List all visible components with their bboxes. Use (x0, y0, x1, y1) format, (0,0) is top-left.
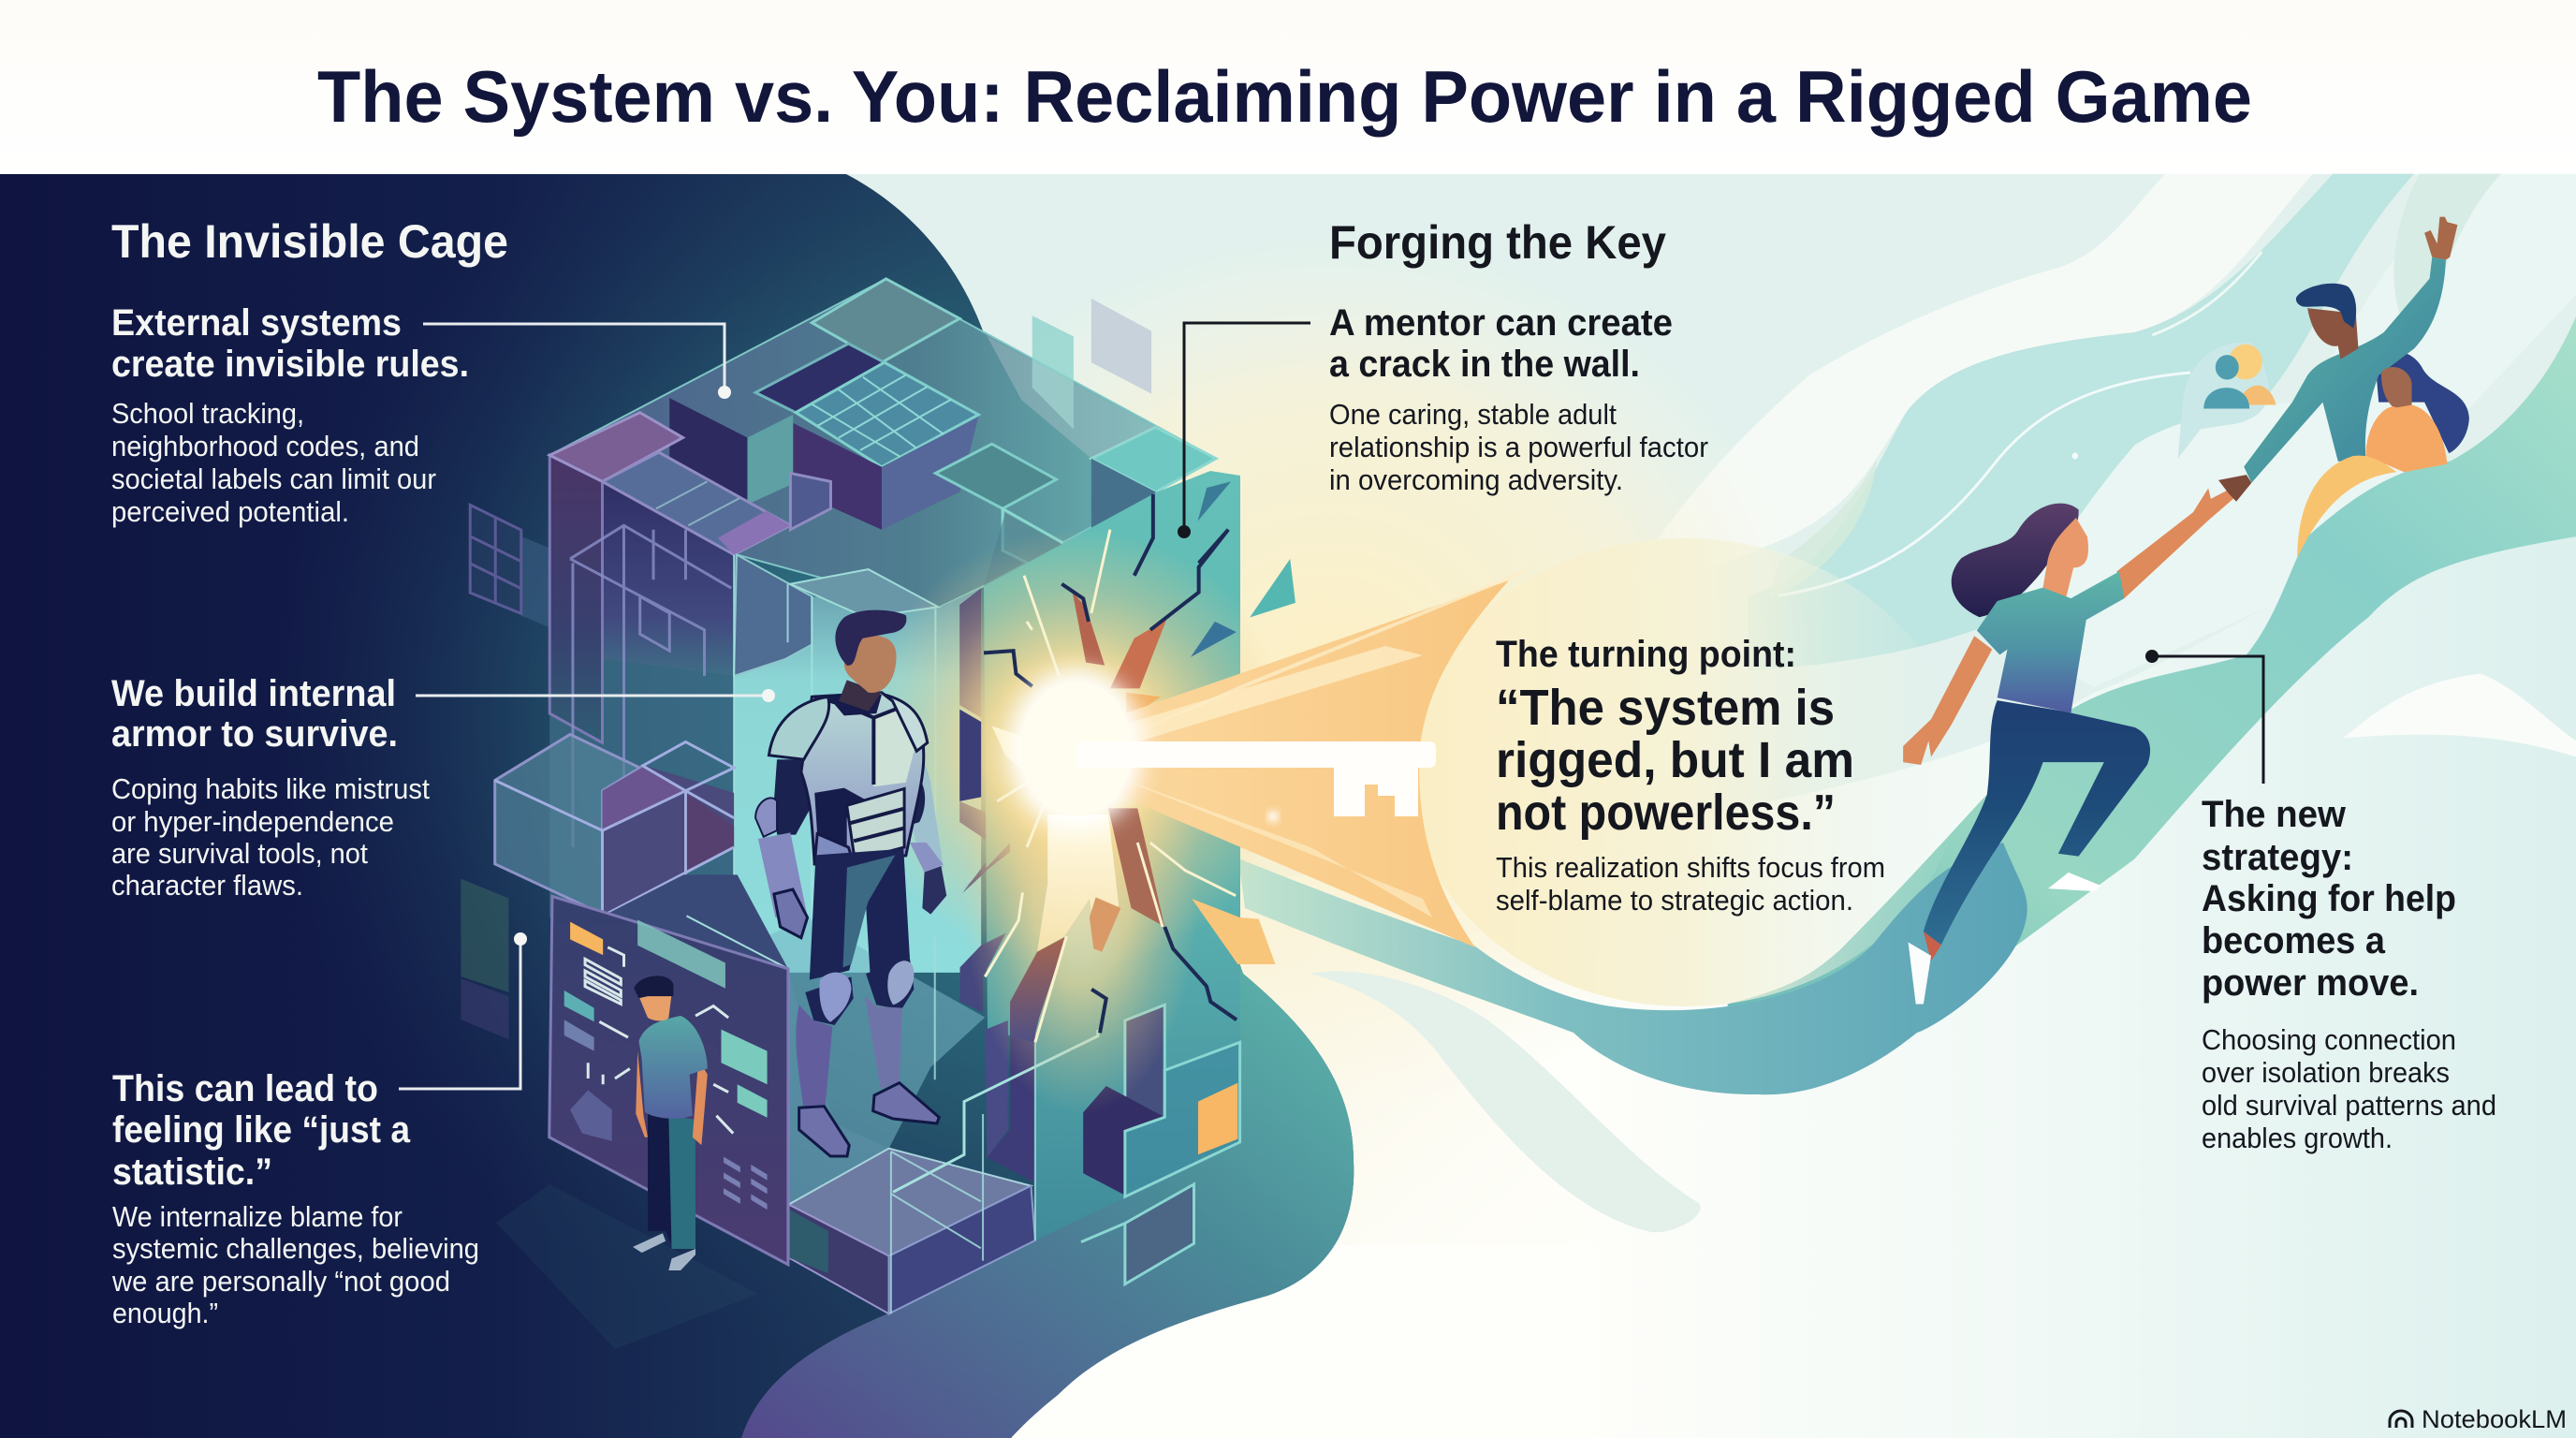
armored man (755, 610, 946, 1156)
text block: mentor (1329, 302, 1708, 496)
cracked wall base (984, 471, 1240, 1240)
isometric cage (495, 279, 1216, 973)
speech bubble icon (2178, 343, 2276, 459)
text block: turning point (1496, 634, 1885, 917)
text block: internal armor: Coping habits like mistrust (111, 772, 430, 805)
cream disc behind quote (1409, 538, 1961, 1006)
text block: just a statistic: enough.” (112, 1297, 218, 1329)
interior column face (603, 481, 734, 676)
second woman (2381, 367, 2412, 410)
text block: turning point: “The system is (1496, 680, 1835, 736)
floating side panes (461, 879, 508, 992)
text block: new strategy: enables growth. (2202, 1122, 2393, 1154)
pane: top diamond (812, 279, 959, 362)
recess: dark (755, 344, 885, 413)
climbing woman (1903, 488, 2236, 1004)
slab (603, 452, 790, 554)
text block: external systems: societal labels can limit our (111, 462, 436, 495)
cage top surface (549, 279, 1216, 609)
inner column light (734, 554, 981, 973)
text block: mentor: A mentor can create (1329, 302, 1673, 344)
text block: mentor: in overcoming adversity. (1329, 463, 1623, 496)
wave: pale green-left corner (1769, 459, 1877, 599)
pink cap (549, 413, 683, 481)
text block: internal armor: are survival tools, not (111, 837, 368, 870)
text block: just a statistic: statistic.” (112, 1152, 272, 1193)
text block: turning point: This realization shifts focus from (1496, 851, 1885, 884)
text block: external systems: External systems (111, 302, 402, 344)
text block: mentor: a crack in the wall. (1329, 344, 1640, 385)
lower dark blocks (985, 1020, 1008, 1158)
floor shadows (496, 1185, 663, 1348)
glass cube (495, 734, 734, 917)
section: Forging the Key text (1329, 216, 1708, 496)
text block: turning point: rigged, but I am (1496, 732, 1854, 788)
hero legs (810, 849, 910, 980)
text block: just a statistic (111, 1068, 479, 1329)
curved lower band (741, 966, 1354, 1438)
top right group (2072, 217, 2469, 558)
cage vertical lines (734, 554, 935, 917)
text block: new strategy: old survival patterns and (2202, 1089, 2496, 1122)
lower wave beneath quote (1238, 843, 2027, 1094)
hair: second woman (2376, 352, 2469, 453)
text block: internal armor: character flaws. (111, 869, 303, 902)
title band (0, 0, 2576, 174)
text block: new strategy (2202, 794, 2496, 1154)
floating glass panes above cage (984, 299, 1156, 586)
callout line: statistic (399, 932, 527, 1089)
angled slab (790, 473, 830, 530)
glass cube base (788, 1149, 1031, 1256)
text block: just a statistic: We internalize blame for (112, 1200, 402, 1233)
light rays cone (1076, 562, 1544, 947)
text block: internal armor: We build internal (111, 673, 396, 714)
section: The Invisible Cage text (111, 215, 508, 1329)
callout line: new strategy (2145, 650, 2263, 784)
callout line: internal armor (416, 689, 775, 702)
hero neck and head (839, 680, 882, 712)
text block: turning point: self-blame to strategic action. (1496, 884, 1853, 917)
wall cracks and shards (959, 481, 1295, 1042)
heading: Forging the Key (1329, 216, 1666, 269)
key of light (1009, 669, 1436, 829)
text block: new strategy: Choosing connection (2202, 1023, 2456, 1056)
text block: external systems: create invisible rules. (111, 344, 469, 385)
small man (633, 976, 708, 1270)
text block: just a statistic: This can lead to (112, 1068, 378, 1109)
burst halo (856, 529, 1296, 1114)
text block: mentor: One caring, stable adult (1329, 398, 1617, 431)
text block: turning point: not powerless.” (1496, 785, 1836, 841)
text block: internal armor (111, 673, 430, 902)
cream band below rays (1240, 899, 1647, 1245)
text block: just a statistic: we are personally “not good (111, 1265, 450, 1298)
text block: new strategy: over isolation breaks (2202, 1056, 2450, 1089)
text block: turning point: The turning point: (1496, 634, 1796, 675)
hero arms (774, 759, 812, 835)
text block: just a statistic: systemic challenges, believing (112, 1232, 479, 1265)
callout line: external systems (423, 324, 731, 399)
text block: external systems: School tracking, (111, 397, 304, 430)
title: The System vs. You: Reclaiming Power in a Rigged Game (317, 55, 2252, 138)
floating grid panel (470, 505, 602, 649)
grid diamond (796, 362, 978, 467)
NotebookLM logo: NotebookLM (2422, 1405, 2567, 1433)
lower inner floor (747, 917, 985, 1205)
helper man (2244, 257, 2446, 483)
pale ribbon shadow (1310, 971, 1701, 1232)
teal ribbon (1728, 316, 2576, 1047)
heading: The Invisible Cage (111, 215, 508, 268)
text block: new strategy: power move. (2202, 962, 2419, 1004)
text block: internal armor: or hyper-independence (111, 805, 394, 838)
text block: external systems: perceived potential. (111, 495, 349, 528)
hero shoulder (768, 697, 829, 759)
text block: new strategy: Asking for help (2202, 878, 2456, 919)
lines inside cage (570, 525, 731, 847)
pale right panes (935, 444, 1057, 508)
text block: just a statistic: feeling like “just a (112, 1109, 411, 1151)
text block: new strategy: becomes a (2202, 920, 2386, 961)
callout line: mentor (1178, 323, 1310, 538)
left lower cage fill (549, 659, 734, 917)
block left recess (669, 398, 747, 513)
block under grid (793, 423, 882, 530)
hero torso (801, 693, 924, 864)
text block: internal armor: armor to survive. (111, 713, 398, 755)
wave thin lines (1778, 373, 2190, 595)
text block: external systems (111, 302, 469, 528)
text block: external systems: neighborhood codes, and (111, 430, 419, 462)
dark corner pillar (959, 588, 1008, 893)
flowing waves: right background (660, 174, 2576, 1438)
lower cage details (747, 843, 1276, 1313)
left column (549, 455, 603, 742)
dark left panel (0, 174, 1354, 1438)
light beam downward (1037, 814, 1119, 952)
text block: mentor: relationship is a powerful factor (1329, 431, 1708, 463)
front pale box (734, 554, 812, 676)
warm glow around the key (842, 234, 1816, 1114)
text block: new strategy: The new (2202, 794, 2347, 835)
UI wall panel (461, 874, 788, 1265)
shards (1197, 481, 1231, 521)
text block: new strategy: strategy: (2202, 837, 2353, 878)
